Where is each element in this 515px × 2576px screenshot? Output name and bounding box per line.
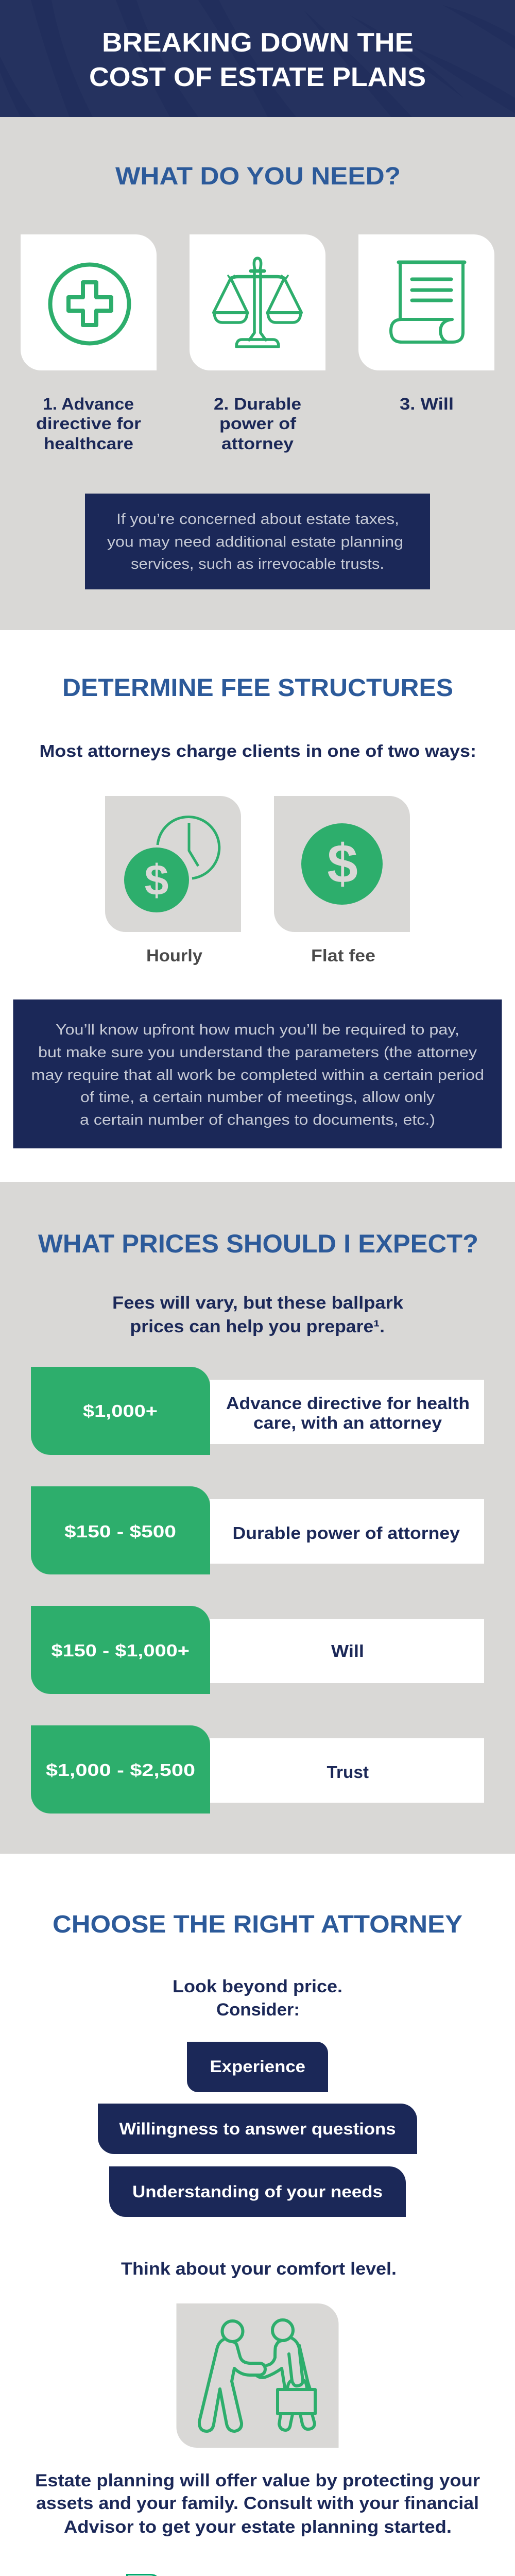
text: look beyond price: Look beyond price. <box>173 1977 342 1996</box>
callout: estate taxes: services, such as irrevocable trusts. <box>131 556 384 572</box>
panel: what prices should i expect <box>0 1182 515 1854</box>
price row: trust: $1,000 - $2,500 <box>46 1760 195 1780</box>
text: closing message: assets and your family. Consult with your financial <box>36 2494 479 2513</box>
label: advance directive: directive for <box>36 414 141 433</box>
price row: will: $150 - $1,000+ <box>52 1641 190 1660</box>
text: look beyond price <box>173 1977 342 2020</box>
pill: willingness to answer questions: Willingness to answer questions <box>119 2120 396 2138</box>
callout: estate taxes <box>85 494 430 589</box>
price row: will <box>31 1606 484 1694</box>
label: advance directive: 1. Advance <box>43 395 134 413</box>
subheading: ballpark prices: prices can help you prepare¹. <box>130 1317 385 1336</box>
text: closing message: Estate planning will offer value by protecting your <box>35 2471 480 2490</box>
icon: clock and coin: $ <box>145 856 168 904</box>
heading: choose the right attorney: CHOOSE THE RIGHT ATTORNEY <box>53 1911 462 1938</box>
price row: durable power of attorney: $150 - $500 <box>64 1522 176 1541</box>
callout: flat fee parameters: may require that all work be completed within a certain period <box>31 1067 484 1083</box>
text: closing message <box>35 2471 480 2537</box>
panel: what do you need <box>0 117 515 630</box>
price row: durable power of attorney <box>31 1486 484 1574</box>
label: advance directive: healthcare <box>44 434 133 453</box>
callout: flat fee parameters: You’ll know upfront how much you’ll be required to pay, <box>56 1022 459 1038</box>
callout: flat fee parameters: a certain number of changes to documents, etc.) <box>80 1112 435 1128</box>
label: advance directive <box>36 395 141 453</box>
icon: clock and coin <box>124 817 219 912</box>
label: durable power of attorney: power of <box>219 414 296 433</box>
icon: medical cross <box>50 265 129 343</box>
label: durable power of attorney <box>214 395 301 453</box>
price row: trust: Trust <box>327 1762 369 1782</box>
title: COST OF ESTATE PLANS <box>89 62 426 92</box>
label: hourly: Hourly <box>146 946 203 965</box>
text: closing message: Advisor to get your estate planning started. <box>64 2517 452 2537</box>
panel: determine fee structures <box>0 630 515 1182</box>
card: durable power of attorney <box>190 234 325 370</box>
price row: trust <box>31 1725 484 1814</box>
header banner <box>0 0 515 117</box>
logo: fifth third bank <box>126 2574 389 2576</box>
heading: prices: WHAT PRICES SHOULD I EXPECT? <box>38 1229 478 1258</box>
callout: estate taxes: If you’re concerned about estate taxes, <box>116 511 399 528</box>
subheading: two ways: Most attorneys charge clients in one of two ways: <box>39 741 476 760</box>
price row: durable power of attorney: Durable power of attorney <box>233 1523 460 1543</box>
panel: choose the right attorney <box>0 1854 515 2576</box>
price row: advance directive: $1,000+ <box>83 1401 158 1420</box>
card: flat fee <box>274 796 410 932</box>
price row: advance directive <box>31 1367 484 1455</box>
callout: estate taxes: you may need additional estate planning <box>107 534 403 550</box>
heading: what do you need: WHAT DO YOU NEED? <box>115 163 401 190</box>
pill: understanding of your needs <box>109 2166 406 2217</box>
card: hourly <box>105 796 241 932</box>
subheading: ballpark prices <box>112 1293 403 1336</box>
price row: advance directive: Advance directive for health <box>226 1394 470 1413</box>
callout: flat fee parameters: but make sure you understand the parameters (the attorney <box>38 1044 477 1061</box>
heading: determine fee structures: DETERMINE FEE STRUCTURES <box>62 674 453 702</box>
subheading: ballpark prices: Fees will vary, but these ballpark <box>112 1293 403 1313</box>
label: durable power of attorney: 2. Durable <box>214 395 301 413</box>
card: will <box>358 234 494 370</box>
pill: experience: Experience <box>210 2057 305 2076</box>
text: look beyond price: Consider: <box>216 2000 300 2020</box>
label: flat fee: Flat fee <box>311 946 375 965</box>
title: BREAKING DOWN THE <box>102 28 414 58</box>
icon: 5/3 shield <box>126 2574 160 2576</box>
card: advance directive <box>21 234 157 370</box>
callout: flat fee parameters: of time, a certain number of meetings, allow only <box>80 1089 435 1106</box>
label: durable power of attorney: attorney <box>221 434 294 453</box>
pill: willingness to answer questions <box>98 2104 417 2154</box>
icon: scroll document <box>391 262 465 342</box>
icon: dollar coin <box>301 823 383 905</box>
icon: dollar coin: $ <box>327 833 358 894</box>
text: comfort level: Think about your comfort level. <box>121 2259 397 2279</box>
pill: understanding of your needs: Understanding of your needs <box>132 2182 383 2201</box>
price row: will: Will <box>331 1641 364 1660</box>
title <box>89 28 426 92</box>
callout: flat fee parameters <box>13 999 502 1148</box>
pill: experience <box>187 2042 328 2092</box>
icon: two people shaking hands <box>199 2320 315 2431</box>
price row: advance directive: care, with an attorney <box>253 1413 442 1432</box>
card: handshake <box>176 2303 339 2448</box>
label: will: 3. Will <box>400 395 454 413</box>
icon: scales of justice <box>214 258 301 347</box>
